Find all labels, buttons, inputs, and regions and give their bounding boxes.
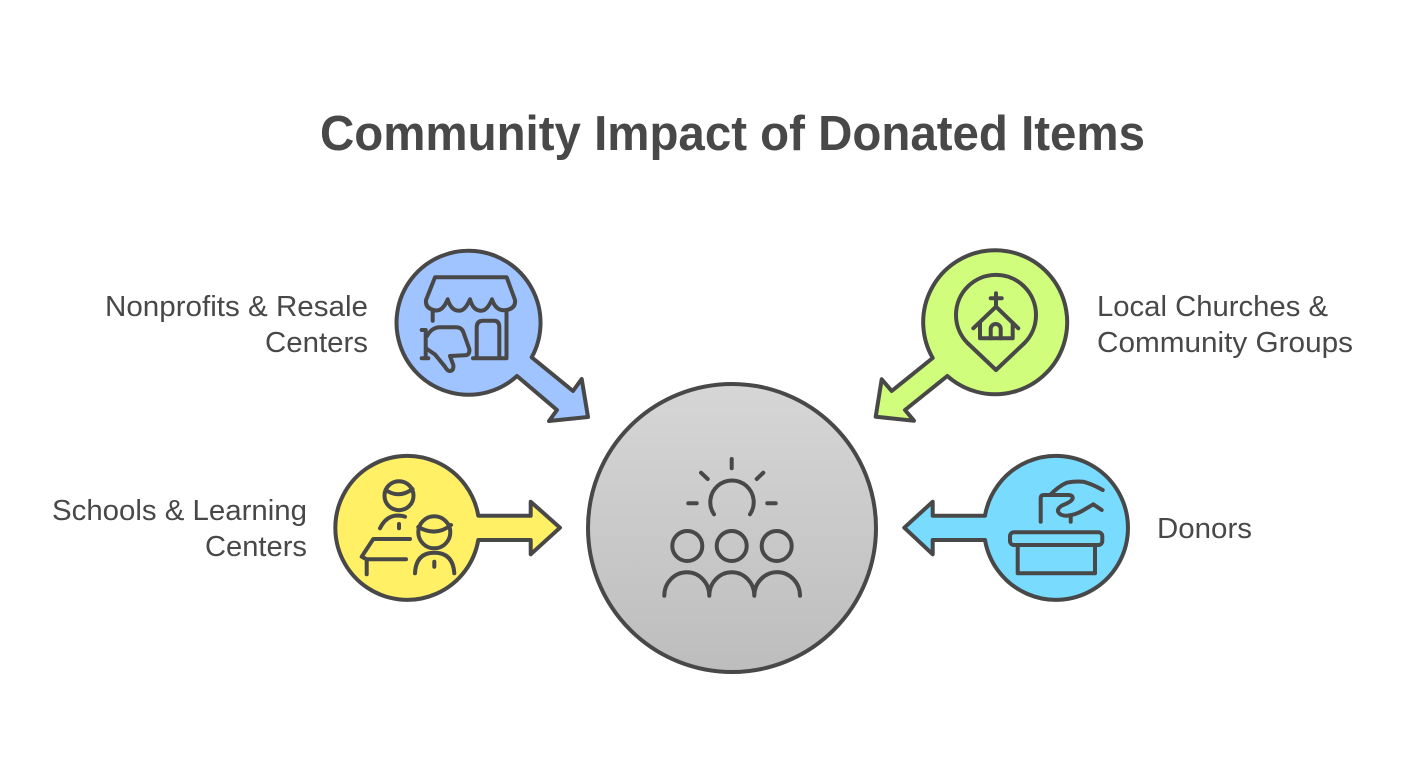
central grey circle xyxy=(588,384,876,672)
label: donors: Donors xyxy=(1157,513,1252,545)
icon: church in location pin xyxy=(956,275,1036,370)
icon: hand dropping item in donation box xyxy=(1010,481,1103,573)
yellow circle with arrow xyxy=(335,456,560,600)
icon: community under sun xyxy=(664,459,800,596)
label: schools xyxy=(52,495,307,563)
panel: donors xyxy=(904,456,1252,600)
panel: nonprofits and resale centers xyxy=(105,251,588,421)
panel: schools and learning centers xyxy=(52,456,560,600)
label: local churches: Local Churches & xyxy=(1097,291,1328,323)
icon: storefront with thumbs down xyxy=(422,277,515,371)
green circle with arrow xyxy=(876,250,1067,421)
cyan circle with arrow xyxy=(904,456,1128,600)
label: nonprofits: Nonprofits & Resale xyxy=(105,291,368,323)
label: nonprofits: Centers xyxy=(265,327,368,359)
label: nonprofits xyxy=(105,291,368,359)
label: schools: Centers xyxy=(205,531,307,563)
label: local churches xyxy=(1097,291,1353,359)
title: Community Impact of Donated Items xyxy=(320,107,1145,161)
label: schools: Schools & Learning xyxy=(52,495,307,527)
icon: teacher and student at desk xyxy=(362,481,454,574)
blue circle with arrow xyxy=(397,251,588,421)
panel: central community circle xyxy=(588,384,876,672)
label: local churches: Community Groups xyxy=(1097,327,1353,359)
panel: local churches and community groups xyxy=(876,250,1353,421)
